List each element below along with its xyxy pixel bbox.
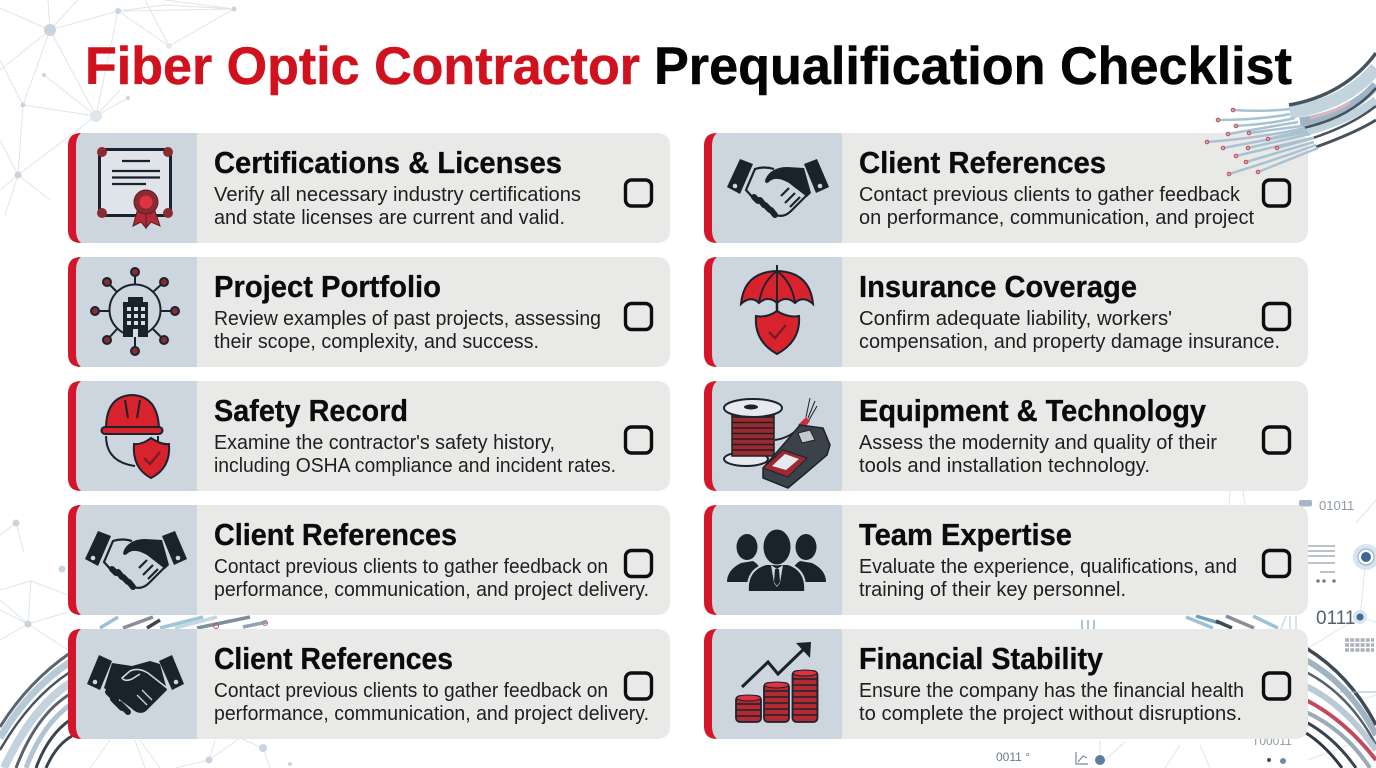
description: Verify all necessary industry certifications (214, 184, 581, 206)
panel: Equipment & Technology (704, 381, 1308, 491)
title: Fiber Optic Contractor (85, 37, 640, 96)
checkbox (1264, 180, 1290, 206)
description: performance, communication, and project delivery. (214, 579, 649, 601)
icon: team of three (727, 529, 826, 592)
heading: Certifications & Licenses (214, 145, 562, 180)
background: network and data motifs lower right: 01011 (1319, 498, 1354, 513)
description: their scope, complexity, and success. (214, 331, 539, 353)
description: on performance, communication, and project (859, 207, 1254, 229)
checkbox (1264, 304, 1290, 330)
description: Assess the modernity and quality of their (859, 432, 1217, 454)
cables: strands visible between right rows (1082, 616, 1296, 629)
panel: Team Expertise (704, 505, 1308, 615)
description: Contact previous clients to gather feedback (859, 184, 1241, 206)
background: network and data motifs lower right: 0111 (1316, 608, 1355, 629)
icon: handshake outline (727, 159, 829, 216)
cables: top right fiber bundle (1205, 53, 1376, 176)
heading: Client References (859, 145, 1106, 180)
panel: Certifications & Licenses (68, 133, 670, 243)
background: network and data motifs lower right: 0011 ° (996, 750, 1030, 764)
description: compensation, and property damage insurance. (859, 331, 1280, 353)
heading: Project Portfolio (214, 269, 441, 304)
background: network lower left (0, 520, 292, 768)
description: Ensure the company has the financial health (859, 680, 1244, 702)
icon: handshake outline (85, 531, 187, 588)
description: training of their key personnel. (859, 579, 1126, 601)
title: Prequalification Checklist (654, 37, 1292, 96)
checkbox (626, 550, 652, 576)
icon: handshake solid (87, 655, 184, 713)
panel: Financial Stability (704, 629, 1308, 739)
heading: Insurance Coverage (859, 269, 1137, 304)
checkbox (626, 427, 652, 453)
icon: hard hat and shield (102, 395, 169, 478)
description: Examine the contractor's safety history, (214, 432, 555, 454)
icon: umbrella and shield (741, 265, 813, 354)
icon: fiber spool and splicer (724, 398, 830, 488)
description: Review examples of past projects, assessing (214, 308, 601, 330)
panel: Client References (left row 4) (68, 505, 670, 615)
background: network top left (0, 0, 236, 215)
heading: Safety Record (214, 393, 408, 428)
cables: strands visible between left rows (100, 617, 268, 628)
icon: certificate (97, 147, 173, 228)
description: Evaluate the experience, qualifications, and (859, 556, 1237, 578)
panel: Project Portfolio (68, 257, 670, 367)
panel: Client References (left row 5) (68, 629, 670, 739)
heading: Financial Stability (859, 641, 1104, 676)
panel: Insurance Coverage (704, 257, 1308, 367)
heading: Team Expertise (859, 517, 1072, 552)
checkbox (626, 180, 652, 206)
icon: coin stacks with rising arrow (736, 642, 818, 722)
icon: building network (91, 268, 179, 355)
cables: bottom right bundle (1306, 648, 1376, 768)
description: performance, communication, and project delivery. (214, 703, 649, 725)
heading: Equipment & Technology (859, 393, 1207, 428)
heading: Client References (214, 641, 453, 676)
description: Contact previous clients to gather feedback on (214, 680, 608, 702)
checkbox (1264, 550, 1290, 576)
description: tools and installation technology. (859, 455, 1150, 477)
checkbox (626, 304, 652, 330)
description: including OSHA compliance and incident rates. (214, 455, 616, 477)
description: to complete the project without disruptions. (859, 703, 1242, 725)
checkbox (626, 673, 652, 699)
checkbox (1264, 427, 1290, 453)
panel: Client References (right row 1) (704, 133, 1308, 243)
heading: Client References (214, 517, 457, 552)
background: network and data motifs lower right: T00011 (1252, 734, 1292, 748)
cables: bottom left bundle (0, 653, 72, 768)
checkbox (1264, 673, 1290, 699)
panel: Safety Record (68, 381, 670, 491)
title (85, 37, 1292, 96)
description: Confirm adequate liability, workers' (859, 308, 1172, 330)
description: and state licenses are current and valid. (214, 207, 565, 229)
description: Contact previous clients to gather feedback on (214, 556, 608, 578)
background: network and data motifs lower right (996, 491, 1376, 768)
